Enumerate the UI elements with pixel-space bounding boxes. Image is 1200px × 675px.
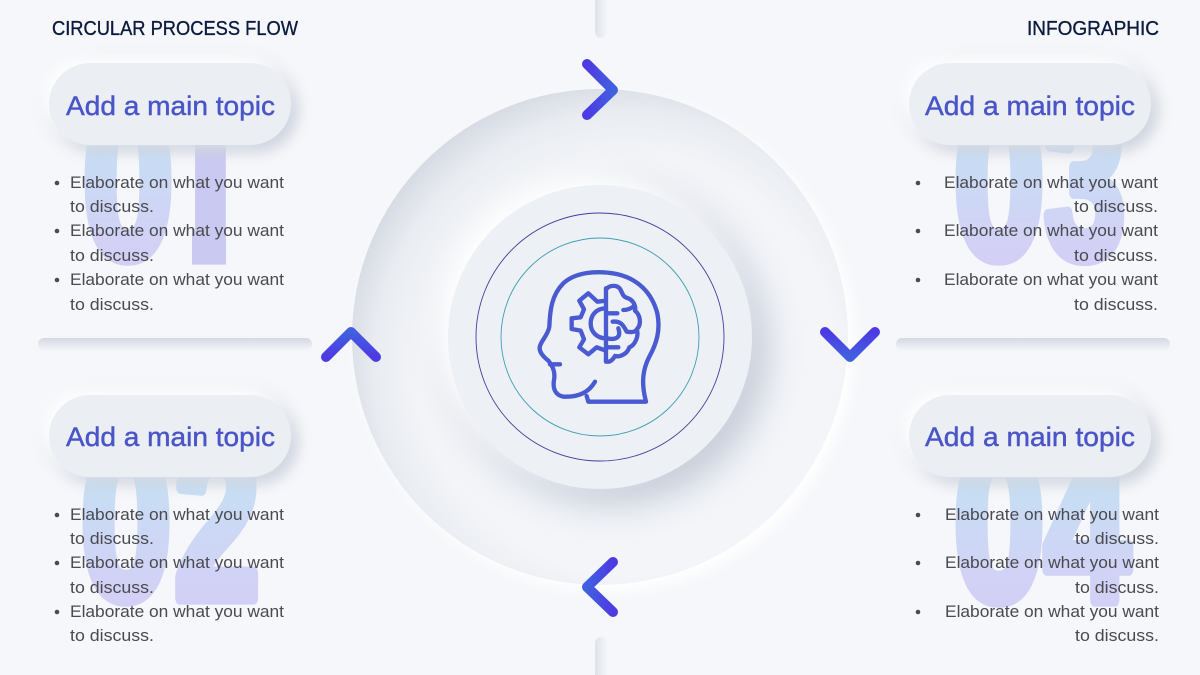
- topic pill: Add a main topic: [925, 422, 1135, 452]
- bullet list: Elaborate on what you want: [945, 603, 1159, 621]
- bullet list: Elaborate on what you want: [945, 554, 1159, 572]
- bullet list: Elaborate on what you want: [70, 222, 284, 240]
- bullet list: Elaborate on what you want: [70, 506, 284, 524]
- bullet list: Elaborate on what you want: [70, 554, 284, 572]
- number 04: [954, 401, 1130, 648]
- icon: head with gear and brain: [540, 272, 659, 402]
- number 02: [81, 399, 260, 646]
- bullet list: Elaborate on what you want: [944, 271, 1158, 289]
- topic pill: Add a main topic: [925, 91, 1135, 121]
- number 03: 3: [1044, 57, 1125, 304]
- number 04: 0: [954, 401, 1044, 647]
- arrow: left chevron: [326, 332, 376, 357]
- bullet list: Elaborate on what you want: [945, 506, 1159, 524]
- top connector bar: [595, 0, 607, 38]
- bullet list: to discuss.: [1075, 579, 1159, 597]
- bullet list: [55, 174, 284, 314]
- bullet list: Elaborate on what you want: [944, 174, 1158, 192]
- panel: topic 01: [49, 59, 291, 314]
- arrow: right chevron: [825, 332, 875, 357]
- number 02: 2: [174, 399, 260, 646]
- topic pill: [49, 395, 291, 477]
- bullet list: to discuss.: [70, 627, 154, 645]
- bottom connector bar: [595, 637, 607, 675]
- right connector bar: [896, 338, 1170, 351]
- arrow: top chevron: [587, 64, 613, 115]
- panel: topic 03: [909, 57, 1158, 314]
- topic pill: Add a main topic: [66, 91, 275, 121]
- outer disc: [352, 89, 848, 585]
- topic pill: [909, 395, 1151, 477]
- bullet list: to discuss.: [1074, 198, 1158, 216]
- bullet list: Elaborate on what you want: [70, 174, 284, 192]
- panel: topic 02: [49, 395, 291, 646]
- bullet list: to discuss.: [70, 530, 154, 548]
- bullet list: to discuss.: [1074, 247, 1158, 265]
- bullet list: [916, 506, 1159, 645]
- bullet list: Elaborate on what you want: [944, 222, 1158, 240]
- bullet list: to discuss.: [70, 296, 154, 314]
- bullet list: to discuss.: [1075, 530, 1159, 548]
- bullet list: Elaborate on what you want: [70, 603, 284, 621]
- bullet list: Elaborate on what you want: [70, 271, 284, 289]
- inner disc with rings: [448, 185, 752, 489]
- panel: topic 04: [909, 395, 1159, 648]
- number 01: [84, 145, 226, 266]
- title: CIRCULAR PROCESS FLOW: [52, 18, 298, 40]
- bullet list: to discuss.: [70, 247, 154, 265]
- bullet list: to discuss.: [1075, 627, 1159, 645]
- bullet list: [916, 174, 1158, 314]
- topic pill: [909, 63, 1151, 145]
- left connector bar: [38, 338, 312, 351]
- number 03: [954, 57, 1125, 305]
- number 03: 0: [954, 59, 1044, 305]
- subtitle label: INFOGRAPHIC: [1027, 18, 1159, 40]
- bullet list: to discuss.: [1074, 296, 1158, 314]
- number 04: 4: [1044, 401, 1130, 648]
- number 02: 0: [81, 400, 171, 646]
- arrow: bottom chevron: [587, 562, 613, 612]
- topic pill: Add a main topic: [66, 422, 275, 452]
- number 01: 1: [164, 59, 250, 305]
- bullet list: [55, 506, 284, 645]
- bullet list: to discuss.: [70, 579, 154, 597]
- topic pill: [49, 63, 291, 145]
- bullet list: to discuss.: [70, 198, 154, 216]
- number 01: 0: [83, 59, 173, 305]
